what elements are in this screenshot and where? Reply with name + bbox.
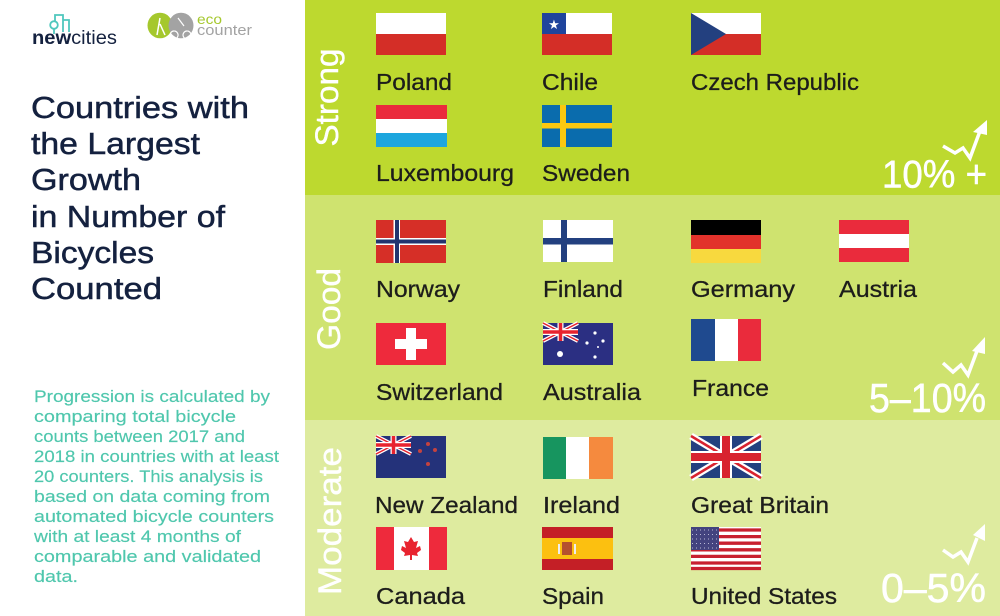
name: Spain: Spain: [542, 583, 604, 609]
logo: eco counter: counter: [197, 22, 252, 39]
flag: Austria: [839, 220, 909, 262]
methodology text: data.: [34, 567, 78, 586]
growth arrow: [943, 120, 987, 158]
flag: Ireland: [543, 437, 613, 479]
methodology text: counts between 2017 and: [34, 427, 245, 446]
logo: eco counter: [148, 11, 252, 39]
title: Counted: [31, 271, 162, 306]
flag: France: [691, 319, 761, 361]
panel: good: [305, 195, 1000, 421]
title: the Largest: [31, 126, 200, 161]
logo: newcities: [32, 15, 117, 49]
label: Strong: Strong: [309, 48, 345, 146]
methodology text: based on data coming from: [34, 487, 270, 506]
flag: Great Britain: [691, 436, 761, 478]
range: 10% +: 10% +: [882, 154, 987, 196]
name: Austria: Austria: [839, 276, 918, 302]
title: Countries with: [31, 90, 249, 125]
flag: Finland: [543, 220, 613, 262]
label: Moderate: Moderate: [312, 447, 348, 595]
name: Great Britain: Great Britain: [691, 492, 829, 518]
name: Finland: Finland: [543, 276, 623, 302]
flag: Spain: [542, 527, 613, 570]
name: Luxembourg: Luxembourg: [376, 160, 514, 186]
methodology text: Progression is calculated by: [34, 387, 271, 406]
flag: Czech Republic: [691, 13, 761, 55]
flag: Switzerland: [376, 323, 446, 365]
name: Poland: Poland: [376, 69, 452, 95]
flag: New Zealand: [376, 436, 446, 478]
name: Germany: Germany: [691, 276, 795, 302]
flag: United States: [691, 527, 761, 570]
growth arrow: [943, 337, 985, 375]
title: Growth: [31, 162, 141, 197]
flag: Canada: [376, 527, 447, 570]
label: Good: Good: [311, 268, 347, 350]
methodology text: comparing total bicycle: [34, 407, 236, 426]
methodology text: [33, 387, 279, 586]
name: United States: United States: [691, 583, 837, 609]
flag: Australia: [543, 323, 613, 365]
methodology text: with at least 4 months of: [33, 527, 241, 546]
methodology text: 2018 in countries with at least: [34, 447, 279, 466]
name: Australia: Australia: [543, 379, 642, 405]
name: Canada: Canada: [376, 583, 466, 609]
logo: eco counter: eco: [197, 11, 222, 27]
flag: Germany: [691, 220, 761, 263]
methodology text: automated bicycle counters: [34, 507, 274, 526]
name: Ireland: Ireland: [543, 492, 620, 518]
flag: Sweden: [542, 105, 612, 147]
name: Sweden: Sweden: [542, 160, 630, 186]
methodology text: 20 counters. This analysis is: [34, 467, 263, 486]
flag: Norway: [376, 220, 446, 263]
name: Norway: Norway: [376, 276, 460, 302]
flag: Luxembourg: [376, 105, 447, 147]
name: Czech Republic: Czech Republic: [691, 69, 859, 95]
flag: Chile: [542, 13, 612, 55]
growth arrow: [943, 524, 985, 562]
name: Switzerland: Switzerland: [376, 379, 503, 405]
panel: moderate: [305, 420, 1000, 616]
title: [31, 90, 249, 306]
name: France: France: [692, 375, 769, 401]
flag: Poland: [376, 13, 446, 55]
title: Bicycles: [31, 235, 154, 270]
logo: newcities: newcities: [32, 28, 117, 49]
panel: strong: [305, 0, 1000, 196]
range: 0–5%: 0–5%: [881, 565, 986, 611]
range: 5–10%: 5–10%: [869, 375, 986, 421]
name: New Zealand: New Zealand: [375, 492, 518, 518]
flag: Chile: ★: [548, 17, 560, 32]
methodology text: comparable and validated: [34, 547, 261, 566]
name: Chile: Chile: [542, 69, 598, 95]
title: in Number of: [31, 199, 225, 234]
